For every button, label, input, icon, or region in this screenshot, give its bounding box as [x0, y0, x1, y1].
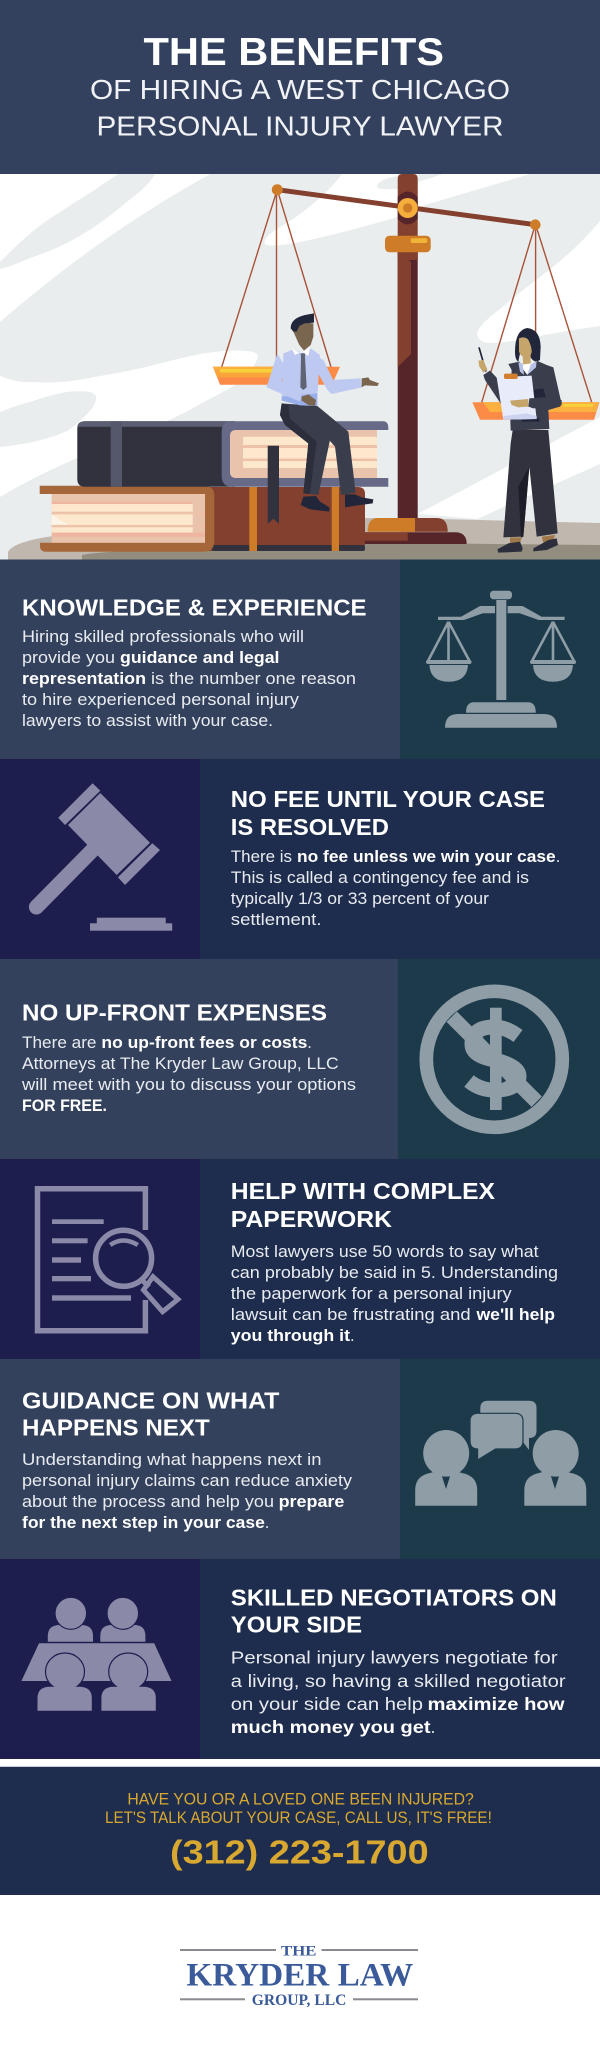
body text: Attorneys at The Kryder Law Group, LLC — [22, 1055, 339, 1073]
title: THE BENEFITS — [144, 31, 444, 74]
body text: lawyers to assist with your case. — [22, 712, 273, 730]
header banner — [0, 0, 600, 174]
body text: maximize how — [428, 1694, 565, 1714]
body text — [22, 628, 356, 730]
body text: FOR FREE. — [22, 1097, 107, 1115]
icon: document with magnifying glass — [38, 1189, 178, 1331]
logo: The Kryder Law Group, LLC: THE — [281, 1944, 316, 1960]
body text: is the number one reason — [151, 670, 356, 688]
body text: settlement. — [231, 911, 322, 929]
panel: knowledge and experience — [0, 560, 600, 759]
ground shadow — [8, 518, 600, 560]
body text — [231, 848, 560, 929]
body text: Understanding what happens next in — [22, 1451, 322, 1469]
body text — [22, 1451, 353, 1532]
call to action text: LET'S TALK ABOUT YOUR CASE, CALL US, IT'S FREE! — [105, 1809, 492, 1827]
heading: SKILLED NEGOTIATORS ON — [231, 1585, 557, 1611]
body text: This is called a contingency fee and is — [231, 869, 529, 887]
logo: The Kryder Law Group, LLC — [180, 1944, 418, 2009]
body text: lawsuit can be frustrating and — [231, 1306, 471, 1324]
subtitle: OF HIRING A WEST CHICAGO — [90, 74, 510, 105]
body text: the paperwork for a personal injury — [231, 1285, 513, 1303]
subtitle: PERSONAL INJURY LAWYER — [96, 111, 504, 142]
heading — [22, 1388, 279, 1441]
body text: There are — [22, 1034, 96, 1052]
icon: scales of justice — [426, 591, 576, 728]
scale base — [365, 518, 467, 544]
body text: . — [265, 1514, 269, 1532]
heading: GUIDANCE ON WHAT — [22, 1388, 279, 1414]
heading: KNOWLEDGE & EXPERIENCE — [22, 595, 367, 621]
logo: The Kryder Law Group, LLC: GROUP, LLC — [252, 1992, 346, 2009]
body text: can probably be said in 5. Understanding — [231, 1264, 558, 1282]
bottom book — [40, 486, 365, 552]
bookmark — [268, 446, 279, 524]
body text: no up-front fees or costs — [101, 1034, 307, 1052]
heading: IS RESOLVED — [231, 814, 389, 840]
body text: Most lawyers use 50 words to say what — [231, 1243, 539, 1261]
call to action banner — [0, 1766, 600, 1895]
body text — [21, 1034, 356, 1115]
body text: . — [350, 1327, 355, 1345]
subtitle — [90, 74, 510, 142]
heading: NO FEE UNTIL YOUR CASE — [231, 786, 545, 812]
body text: provide you — [22, 649, 115, 667]
woman with clipboard — [478, 328, 562, 553]
body text: representation — [22, 670, 146, 688]
body text: will meet with you to discuss your options — [21, 1076, 356, 1094]
body text — [231, 1648, 566, 1737]
panel: skilled negotiators on your side — [0, 1559, 600, 1759]
panel: help with complex paperwork — [0, 1159, 600, 1359]
scale beam and pivot — [272, 184, 541, 252]
body text: no fee unless we win your case — [297, 848, 556, 866]
heading — [231, 1585, 557, 1638]
top book — [77, 421, 388, 487]
heading: PAPERWORK — [231, 1206, 392, 1232]
heading — [231, 1178, 495, 1232]
scale left strings and pan — [213, 192, 340, 385]
body text: Hiring skilled professionals who will — [22, 628, 304, 646]
body text: much money you get — [231, 1717, 431, 1737]
heading: HAPPENS NEXT — [22, 1415, 210, 1441]
body text: . — [556, 848, 560, 866]
panel: guidance on what happens next — [0, 1359, 600, 1559]
icon: gavel — [36, 783, 172, 931]
hero illustration: scales of justice, books, lawyers — [0, 174, 600, 560]
body text: we'll help — [475, 1306, 555, 1324]
body text: typically 1/3 or 33 percent of your — [231, 890, 490, 908]
call to action text — [105, 1790, 492, 1827]
man sitting on books — [267, 313, 379, 512]
icon: crossed-out dollar sign — [426, 991, 562, 1127]
body text: . — [307, 1034, 312, 1052]
body text: about the process and help you — [22, 1493, 274, 1511]
body text: personal injury claims can reduce anxiety — [22, 1472, 353, 1490]
body text: a living, so having a skilled negotiator — [231, 1671, 566, 1691]
body text: for the next step in your case — [22, 1514, 265, 1532]
scale pole — [398, 174, 418, 519]
heading: NO UP-FRONT EXPENSES — [22, 1000, 327, 1026]
body text: . — [430, 1717, 435, 1737]
icon: two people talking — [415, 1401, 586, 1506]
phone number: (312) 223-1700 — [170, 1834, 429, 1871]
body text: Personal injury lawyers negotiate for — [231, 1648, 558, 1668]
call to action text: HAVE YOU OR A LOVED ONE BEEN INJURED? — [127, 1790, 474, 1808]
heading: HELP WITH COMPLEX — [231, 1178, 495, 1204]
body text — [231, 1243, 558, 1345]
scale right strings and pan — [472, 229, 599, 420]
body text: on your side can help — [231, 1694, 423, 1714]
body text: prepare — [279, 1493, 344, 1511]
heading: YOUR SIDE — [231, 1612, 362, 1638]
body text: There is — [231, 848, 292, 866]
panel: no up-front expenses — [0, 959, 600, 1159]
icon: negotiation table — [21, 1597, 172, 1711]
panel: no fee until your case is resolved — [0, 759, 600, 959]
body text: guidance and legal — [120, 649, 280, 667]
heading — [231, 786, 545, 840]
body text: to hire experienced personal injury — [22, 691, 300, 709]
logo: The Kryder Law Group, LLC: KRYDER LAW — [186, 1958, 413, 1994]
body text: you through it — [231, 1327, 351, 1345]
